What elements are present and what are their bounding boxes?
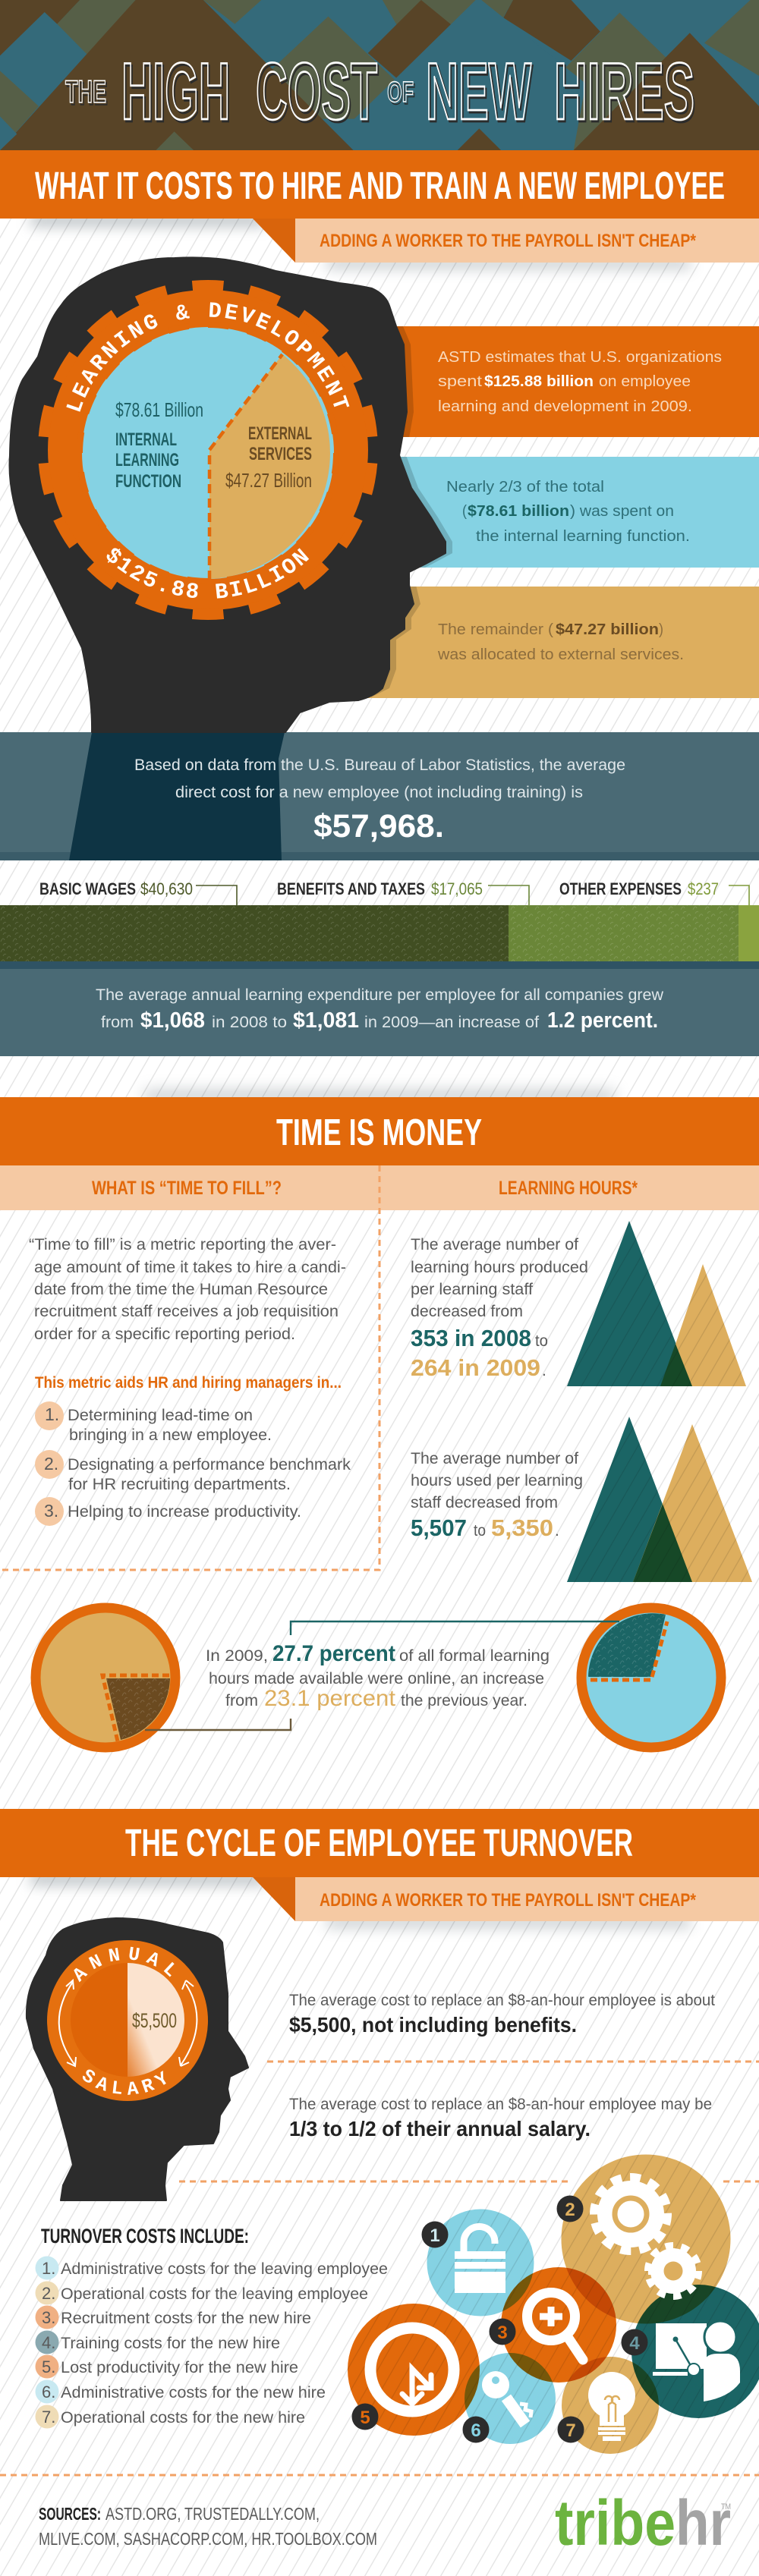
list: turnover costs: 2. — [42, 2284, 55, 2303]
text block: learning hours produced: 264 in 2009 — [411, 1354, 540, 1381]
slate band: annual learning expenditure — [0, 961, 759, 1056]
gear text: learning and development — [80, 317, 336, 413]
slate band: annual learning expenditure: from — [101, 1014, 134, 1031]
number badges: 7 — [565, 2420, 576, 2441]
cost breakdown labels: OTHER EXPENSES — [559, 879, 682, 898]
ribbon: adding a worker repeat — [253, 1877, 759, 1921]
text block: learning hours produced: per learning staff — [411, 1281, 533, 1298]
pie: internal learning function — [82, 327, 334, 579]
slate band: annual learning expenditure: The average annual learning expenditure per employee for all companies grew — [96, 986, 664, 1004]
info band: ASTD estimate: on employee — [599, 373, 691, 390]
pie labels external: $47.27 Billion — [225, 469, 312, 492]
numbered list: metric benefits: 2. — [44, 1454, 58, 1474]
dial label salary: SALARY — [82, 2070, 166, 2095]
title: NEW — [426, 46, 531, 137]
title — [65, 46, 694, 137]
number badges: 4 — [629, 2333, 640, 2354]
text block: time to fill definition: “Time to fill” is a metric reporting the aver- — [29, 1236, 336, 1253]
list: turnover costs: 7. — [42, 2408, 55, 2427]
head silhouette with learning gear — [9, 256, 446, 733]
neck silhouette over band — [69, 732, 285, 860]
pie dashed divider — [209, 354, 282, 580]
icon: key — [482, 2371, 531, 2424]
number badges: 6 — [471, 2420, 481, 2441]
slate band: annual learning expenditure: in 2008 to — [212, 1014, 287, 1031]
head shadow on bands — [371, 326, 452, 697]
slate band: direct cost: Based on data from the U.S. Bureau of Labor Statistics, the average — [134, 756, 625, 774]
callout: online learning: from — [225, 1692, 258, 1709]
header mountain pattern — [0, 0, 759, 150]
list: turnover costs: 5. — [42, 2357, 55, 2376]
pie labels external — [225, 423, 312, 492]
pie: 23.1 percent — [36, 1608, 175, 1747]
text block: learning hours produced: 353 in 2008 — [411, 1325, 531, 1351]
list: turnover costs: Recruitment costs for the new hire — [61, 2310, 311, 2327]
pie: external services — [209, 354, 330, 579]
numbered list: metric benefits: 3. — [44, 1501, 58, 1521]
icon: presenter at whiteboard — [653, 2321, 740, 2401]
title: COST — [256, 46, 377, 137]
gear label top: LEARNING & DEVELOPMENT — [66, 302, 349, 412]
heading band: cycle of turnover — [0, 1809, 759, 1877]
info band: external share: The remainder ( — [438, 621, 553, 638]
sources — [39, 2504, 377, 2549]
info band: internal share: ( — [462, 503, 467, 520]
dial left half — [71, 1963, 128, 2077]
text block: share of salary — [289, 2096, 712, 2140]
info band: ASTD estimate: learning and development in 2009. — [438, 398, 692, 415]
text block: learning hours produced — [411, 1236, 588, 1381]
cost breakdown labels: BENEFITS AND TAXES — [277, 879, 425, 898]
logo: tribehr: tribe — [555, 2487, 676, 2559]
dial label annual: ANNUAL — [74, 1947, 175, 1982]
text block: time to fill definition: recruitment staff receives a job requisition — [34, 1303, 339, 1320]
number badges — [352, 2196, 648, 2443]
list: turnover costs: Administrative costs for the leaving employee — [61, 2260, 388, 2278]
icon: ring with arrows — [370, 2328, 454, 2411]
info band: internal share: the internal learning function. — [476, 528, 690, 545]
dial right half — [128, 1963, 184, 2077]
title: THE — [65, 74, 106, 109]
subheading band: LEARNING HOURS* — [499, 1178, 638, 1199]
info band: internal share — [364, 457, 759, 568]
pie labels internal: FUNCTION — [115, 471, 181, 492]
list: turnover costs: Operational costs for the new hire — [61, 2409, 305, 2427]
subheading: metric aids: This metric aids HR and hiring managers in... — [35, 1374, 342, 1392]
text block: hours used: 5,350 — [491, 1514, 553, 1541]
list: turnover costs: Training costs for the new hire — [61, 2335, 280, 2352]
cost breakdown labels: $17,065 — [431, 879, 483, 898]
list: turnover costs: 3. — [42, 2308, 55, 2327]
subheading band: WHAT IS “TIME TO FILL”? — [92, 1178, 282, 1199]
cost breakdown labels: BASIC WAGES — [39, 879, 136, 898]
info band: internal share: $78.61 billion — [468, 503, 569, 520]
heading band: time is money — [0, 1097, 759, 1165]
numbered list: metric benefits — [35, 1401, 351, 1526]
text block: learning hours produced: learning hours produced — [411, 1259, 588, 1276]
slate band: annual learning expenditure: 1.2 percent. — [547, 1008, 658, 1033]
slate band: direct cost: $57,968. — [313, 808, 444, 845]
text block: hours used: The average number of — [411, 1450, 578, 1467]
callout: online learning — [206, 1641, 550, 1711]
number badges: 3 — [497, 2323, 508, 2343]
text block: replacement cost — [289, 1992, 715, 2037]
info band: ASTD estimate: spent — [438, 373, 483, 390]
info band: ASTD estimate: ASTD estimates that U.S. organizations — [438, 349, 722, 366]
ribbon: adding a worker — [253, 219, 759, 263]
info band: external share: was allocated to external services. — [437, 646, 684, 663]
numbered list: metric benefits: for HR recruiting departments. — [68, 1476, 291, 1493]
gear label bottom: $125.88 BILLION — [106, 548, 310, 599]
text block: replacement cost: The average cost to replace an $8-an-hour employee is about — [289, 1992, 715, 2009]
logo: tribehr: hr — [676, 2487, 731, 2559]
subheading band — [0, 1165, 759, 1210]
pie: 27.7 percent — [581, 1608, 721, 1747]
text block: hours used: hours used per learning — [411, 1472, 583, 1489]
dial amount: $5,500 — [132, 2009, 177, 2032]
slate band: annual learning expenditure: $1,068 — [140, 1008, 205, 1033]
list: turnover costs: Administrative costs for the new hire — [61, 2384, 326, 2401]
title: OF — [387, 77, 414, 109]
list: turnover costs: Lost productivity for the new hire — [61, 2359, 298, 2376]
text block: share of salary: 1/3 to 1/2 of their annual salary. — [289, 2117, 591, 2140]
callout: online learning: In 2009, — [206, 1647, 268, 1665]
text block: hours used: staff decreased from — [411, 1494, 558, 1511]
text block: replacement cost: $5,500, not including benefits. — [289, 2013, 577, 2037]
number badges: 1 — [430, 2225, 440, 2246]
numbered list: metric benefits: Determining lead-time on — [68, 1407, 253, 1424]
text block: learning hours produced: to — [535, 1332, 548, 1350]
icon: open padlock — [455, 2226, 505, 2293]
dial baseline top — [78, 1960, 177, 1985]
gear ring and teeth — [43, 285, 373, 615]
callout: online learning: the previous year. — [401, 1692, 528, 1709]
icon: gears — [594, 2178, 698, 2296]
dial arrows — [59, 1980, 197, 2066]
list: turnover costs: Operational costs for the leaving employee — [61, 2285, 368, 2303]
dial disc — [47, 1940, 208, 2101]
number badges: 5 — [360, 2408, 370, 2428]
sources: SOURCES: — [39, 2504, 101, 2524]
numbered list: metric benefits: Helping to increase productivity. — [68, 1503, 301, 1521]
text block: hours used — [411, 1450, 583, 1541]
text block: learning hours produced: decreased from — [411, 1303, 523, 1320]
info band: external share — [364, 587, 759, 698]
info band: external share: ) — [659, 621, 663, 638]
cost breakdown labels: $237 — [688, 879, 719, 898]
text block: time to fill definition: age amount of time it takes to hire a candi- — [34, 1259, 346, 1276]
callout: online learning: 23.1 percent — [264, 1686, 396, 1711]
icon: magnifying glass — [527, 2293, 583, 2360]
pie labels internal — [115, 398, 203, 492]
text block: hours used: 5,507 — [411, 1514, 467, 1541]
slate band: direct cost: direct cost for a new employee (not including training) is — [175, 784, 583, 801]
heading band: time is money: TIME IS MONEY — [276, 1112, 482, 1153]
pie labels internal: $78.61 Billion — [115, 398, 203, 421]
list: turnover costs: 6. — [42, 2383, 55, 2401]
logo: tribehr: TM — [721, 2502, 731, 2512]
text block: learning hours produced: . — [542, 1362, 546, 1379]
slate band: direct cost — [0, 732, 759, 860]
pie labels internal: LEARNING — [115, 450, 179, 470]
callout leader lines — [145, 1621, 619, 1730]
sources: MLIVE.COM, SASHACORP.COM, HR.TOOLBOX.COM — [39, 2529, 377, 2549]
info band: internal share: Nearly 2/3 of the total — [446, 479, 604, 495]
number badges: 2 — [565, 2200, 575, 2220]
callout: online learning: 27.7 percent — [272, 1641, 395, 1666]
slate band: annual learning expenditure: in 2009—an increase of — [364, 1014, 539, 1031]
text block: time to fill definition: order for a specific reporting period. — [34, 1326, 295, 1343]
info band: ASTD estimate — [364, 326, 759, 437]
pie labels external: SERVICES — [249, 444, 312, 464]
heading band: what it costs — [0, 150, 759, 219]
gear baseline bottom — [105, 557, 311, 599]
text block: learning hours produced: The average number of — [411, 1236, 578, 1253]
list: turnover costs: 4. — [42, 2333, 55, 2352]
slate band: annual learning expenditure: $1,081 — [293, 1008, 359, 1033]
head silhouette with annual salary dial — [26, 1917, 249, 2201]
cost breakdown labels — [39, 879, 749, 905]
cost breakdown stacked bar — [0, 905, 759, 961]
cost breakdown labels: $40,630 — [140, 879, 193, 898]
info band: ASTD estimate: $125.88 billion — [484, 373, 594, 390]
numbered list: metric benefits: bringing in a new employee. — [69, 1426, 272, 1444]
icon: light bulb — [588, 2372, 635, 2441]
text block: hours used: to — [474, 1522, 486, 1540]
triangles: learning hours chart two — [567, 1417, 752, 1582]
list: turnover costs — [35, 2257, 388, 2428]
numbered list: metric benefits: 1. — [45, 1404, 59, 1424]
numbered list: metric benefits: Designating a performance benchmark — [68, 1456, 351, 1474]
heading: turnover costs: TURNOVER COSTS INCLUDE: — [41, 2225, 249, 2247]
callout: online learning: of all formal learning — [399, 1647, 550, 1665]
pie labels internal: INTERNAL — [115, 429, 177, 450]
pie notched edge — [80, 325, 336, 581]
info band: external share: $47.27 billion — [556, 621, 659, 638]
list: turnover costs: 1. — [42, 2259, 55, 2278]
turnover cost icon discs — [348, 2155, 759, 2454]
pie labels external: EXTERNAL — [248, 423, 312, 444]
text block: time to fill definition: date from the time the Human Resource — [34, 1281, 328, 1298]
dial baseline bottom — [80, 2077, 175, 2094]
text block: share of salary: The average cost to replace an $8-an-hour employee may be — [289, 2096, 712, 2113]
text block: time to fill definition — [29, 1236, 346, 1343]
callout: online learning: hours made available were online, an increase — [209, 1670, 544, 1687]
info band: internal share: ) was spent on — [570, 503, 674, 520]
sources: ASTD.ORG, TRUSTEDALLY.COM, — [106, 2504, 320, 2524]
triangles: learning hours chart one — [567, 1221, 746, 1386]
text block: hours used: . — [555, 1522, 559, 1540]
title: HIGH — [121, 46, 230, 137]
